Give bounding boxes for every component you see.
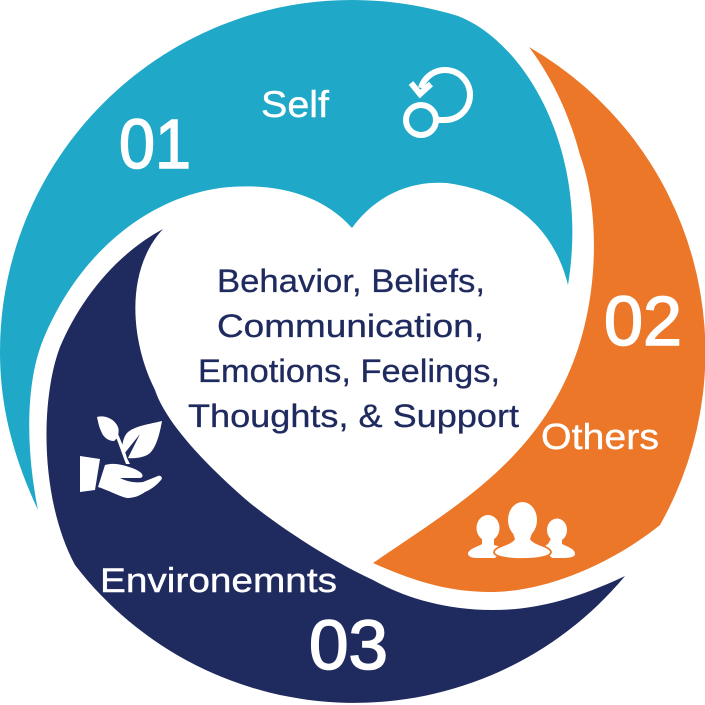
label: Self: Self: [261, 84, 330, 125]
center text: Behavior, Beliefs,: [217, 263, 485, 299]
number 02: 02: [604, 282, 682, 360]
segment 03: Environments (navy): [46, 229, 625, 703]
segment 01: Self (teal): [0, 0, 572, 510]
center text: [188, 263, 519, 434]
number 01: 01: [119, 105, 191, 183]
center text: Emotions, Feelings,: [198, 353, 500, 389]
icon: group of people: [468, 502, 575, 559]
segment 02: Others (orange): [373, 47, 705, 592]
label: Environemnts: Environemnts: [100, 562, 337, 600]
label: Others: Others: [541, 416, 659, 457]
icon: self loop: [406, 70, 470, 135]
number 03: 03: [309, 606, 388, 684]
center text: Thoughts, & Support: [188, 398, 519, 434]
icon: hand holding plant: [80, 416, 162, 498]
center text: Communication,: [217, 308, 484, 344]
